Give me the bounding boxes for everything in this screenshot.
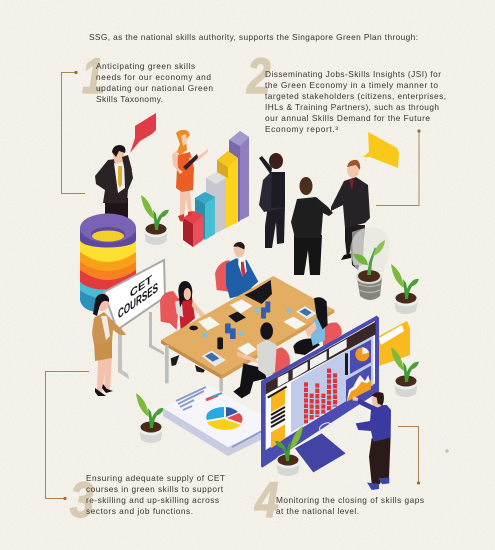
- connector 3: [46, 372, 89, 500]
- chair: blue suit man: [215, 260, 230, 292]
- intro heading: SSG, as the national skills authority, supports the Singapore Green Plan through:: [89, 32, 418, 42]
- left woman chair legs: [171, 355, 205, 373]
- woman in orange dress: [172, 130, 208, 222]
- text block 2: our annual Skills Demand for the Future: [265, 113, 430, 123]
- computer monitor: [261, 316, 379, 472]
- text block 4: [276, 495, 424, 516]
- red speech bubble: [130, 113, 156, 153]
- plant top left: [141, 195, 169, 245]
- text block 2: IHLs & Training Partners), such as through: [265, 102, 439, 112]
- businessman on phone: [95, 145, 133, 225]
- man pointing: [259, 153, 285, 248]
- small decorative speck: [445, 449, 449, 453]
- laptop: [244, 280, 272, 304]
- text block 4: Monitoring the closing of skills gaps: [276, 495, 424, 505]
- stand button: [318, 421, 332, 432]
- light bulb with plant: [350, 227, 389, 300]
- table: [161, 276, 334, 392]
- connector 4: [398, 426, 420, 485]
- screen header: [266, 322, 376, 394]
- table items: [189, 299, 317, 367]
- plant lower left: [136, 393, 164, 443]
- text block 3: sectors and job functions.: [86, 506, 193, 516]
- colourful ring stack: [80, 214, 136, 312]
- yellow speech bubble: [363, 132, 399, 168]
- presenter woman: [92, 294, 126, 396]
- woman in red top: [175, 281, 207, 330]
- text block 1: updating our national Green: [96, 83, 213, 93]
- text block 2: targeted stakeholders (citizens, enterprises,: [265, 91, 446, 101]
- CET courses board: COURSES: [118, 280, 158, 323]
- screen: [266, 321, 375, 450]
- text block 1: [96, 61, 213, 104]
- man shaking hands, back view: [291, 177, 333, 275]
- number 3: 3: [70, 472, 94, 528]
- text block 3: courses in green skills to support: [86, 484, 224, 494]
- CET courses board: [104, 260, 165, 379]
- number 4: 4: [254, 472, 279, 528]
- header cells: [278, 339, 347, 387]
- number 2: 2: [246, 48, 271, 104]
- text block 2: Economy report.³: [265, 124, 338, 134]
- text block 1: Anticipating green skills: [96, 61, 195, 71]
- man in blue suit: [226, 242, 258, 298]
- CET courses board: CET: [130, 272, 152, 300]
- text block 2: [265, 69, 446, 134]
- man in grey shirt: [233, 322, 290, 398]
- text block 2: the Green Economy in a timely manner to: [265, 80, 438, 90]
- left panel: [268, 387, 287, 448]
- plant by monitor: [275, 426, 303, 476]
- folder: [379, 321, 410, 366]
- text block 2: Disseminating Jobs-Skills Insights (JSI) for: [265, 69, 441, 79]
- text block 3: re-skilling and up-skilling across: [86, 495, 219, 505]
- report stack with pie chart: [163, 385, 285, 456]
- text block 3: Ensuring adequate supply of CET: [86, 473, 225, 483]
- man in suit facing left: [331, 160, 370, 270]
- plant right lower: [391, 347, 419, 397]
- connector 1: [62, 71, 85, 194]
- man in blue shirt at monitor: [352, 392, 391, 490]
- chair: left woman: [160, 291, 179, 330]
- text block 1: Skills Taxonomy.: [96, 94, 163, 104]
- text block 4: at the national level.: [276, 506, 359, 516]
- text block 3: [86, 473, 225, 516]
- number 1: 1: [82, 47, 104, 104]
- connector 2: [376, 129, 421, 206]
- woman in blue top: [293, 297, 342, 355]
- text block 1: needs for our economy and: [96, 72, 211, 82]
- monitor body: [261, 316, 379, 468]
- plant right upper: [391, 264, 419, 314]
- bar panel: [291, 336, 373, 432]
- red pixel bars: [306, 369, 335, 423]
- monitor stand: [295, 433, 346, 472]
- side panels: [345, 340, 371, 402]
- meeting table group: [160, 242, 342, 398]
- bar chart: [183, 131, 249, 247]
